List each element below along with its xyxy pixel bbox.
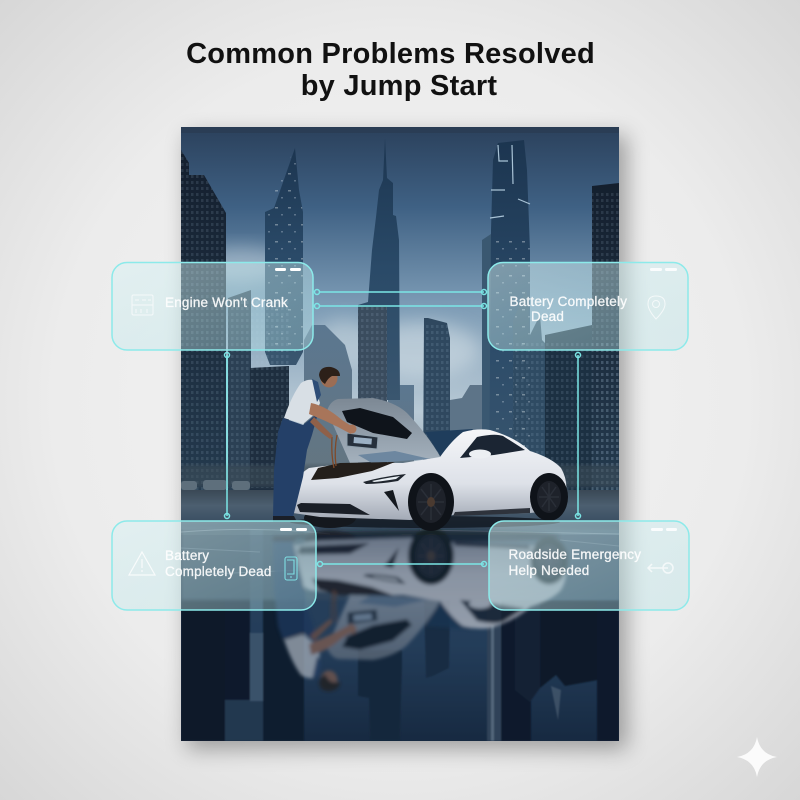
- short tower: [423, 318, 450, 460]
- icon: engine: [132, 295, 153, 315]
- clouds: [190, 247, 480, 378]
- reflected buildings: [181, 530, 619, 741]
- icon: tow hook: [648, 563, 673, 573]
- panel: Roadside Emergency Help Needed: Help Needed: [508, 563, 590, 578]
- label: Battery: [165, 548, 209, 563]
- icon: warning triangle: [129, 552, 155, 575]
- twin tower right: [490, 140, 530, 439]
- distant buildings: [304, 234, 491, 490]
- mid-left block: [228, 290, 251, 490]
- connector lines: [224, 290, 580, 566]
- parked cars: [181, 480, 250, 490]
- icon: phone: [285, 557, 297, 580]
- icon: sparkle watermark: [737, 737, 777, 777]
- car and mechanic: [273, 367, 568, 531]
- icon: location pin: [648, 296, 665, 319]
- panel: Battery Completely Dead (top right): [488, 262, 688, 350]
- window lights: [181, 148, 619, 490]
- centre spire: [358, 138, 400, 400]
- wet ground reflection: [181, 530, 619, 741]
- sky: [181, 127, 619, 492]
- label: Roadside Emergency: [508, 547, 641, 562]
- reflected car and man: [273, 527, 568, 691]
- panel: Engine Won't Crank: [112, 262, 313, 350]
- title: Common Problems Resolved: [186, 38, 595, 70]
- title: by Jump Start: [301, 70, 497, 102]
- title: [186, 38, 595, 102]
- left tower: [181, 150, 226, 490]
- puddle band: [181, 529, 488, 601]
- poster top edge shade: [181, 127, 619, 133]
- poster photograph: [181, 127, 619, 741]
- pointed tower: [265, 148, 303, 365]
- label: Battery Completely: [510, 294, 627, 309]
- label: Engine Won't Crank: [165, 295, 288, 310]
- panel: Battery Completely Dead (bottom left): Completely Dead: [165, 564, 272, 579]
- city skyline: [181, 138, 619, 490]
- poster drop shadow: [187, 135, 627, 749]
- reflection tint: [181, 535, 619, 741]
- panel: Battery Completely Dead (top right): Dead: [531, 309, 564, 324]
- panel: Battery Completely Dead (bottom left): [112, 521, 316, 610]
- right cluster: [513, 317, 545, 457]
- horizon & street: [181, 465, 619, 487]
- panel: Roadside Emergency Help Needed: [489, 521, 689, 610]
